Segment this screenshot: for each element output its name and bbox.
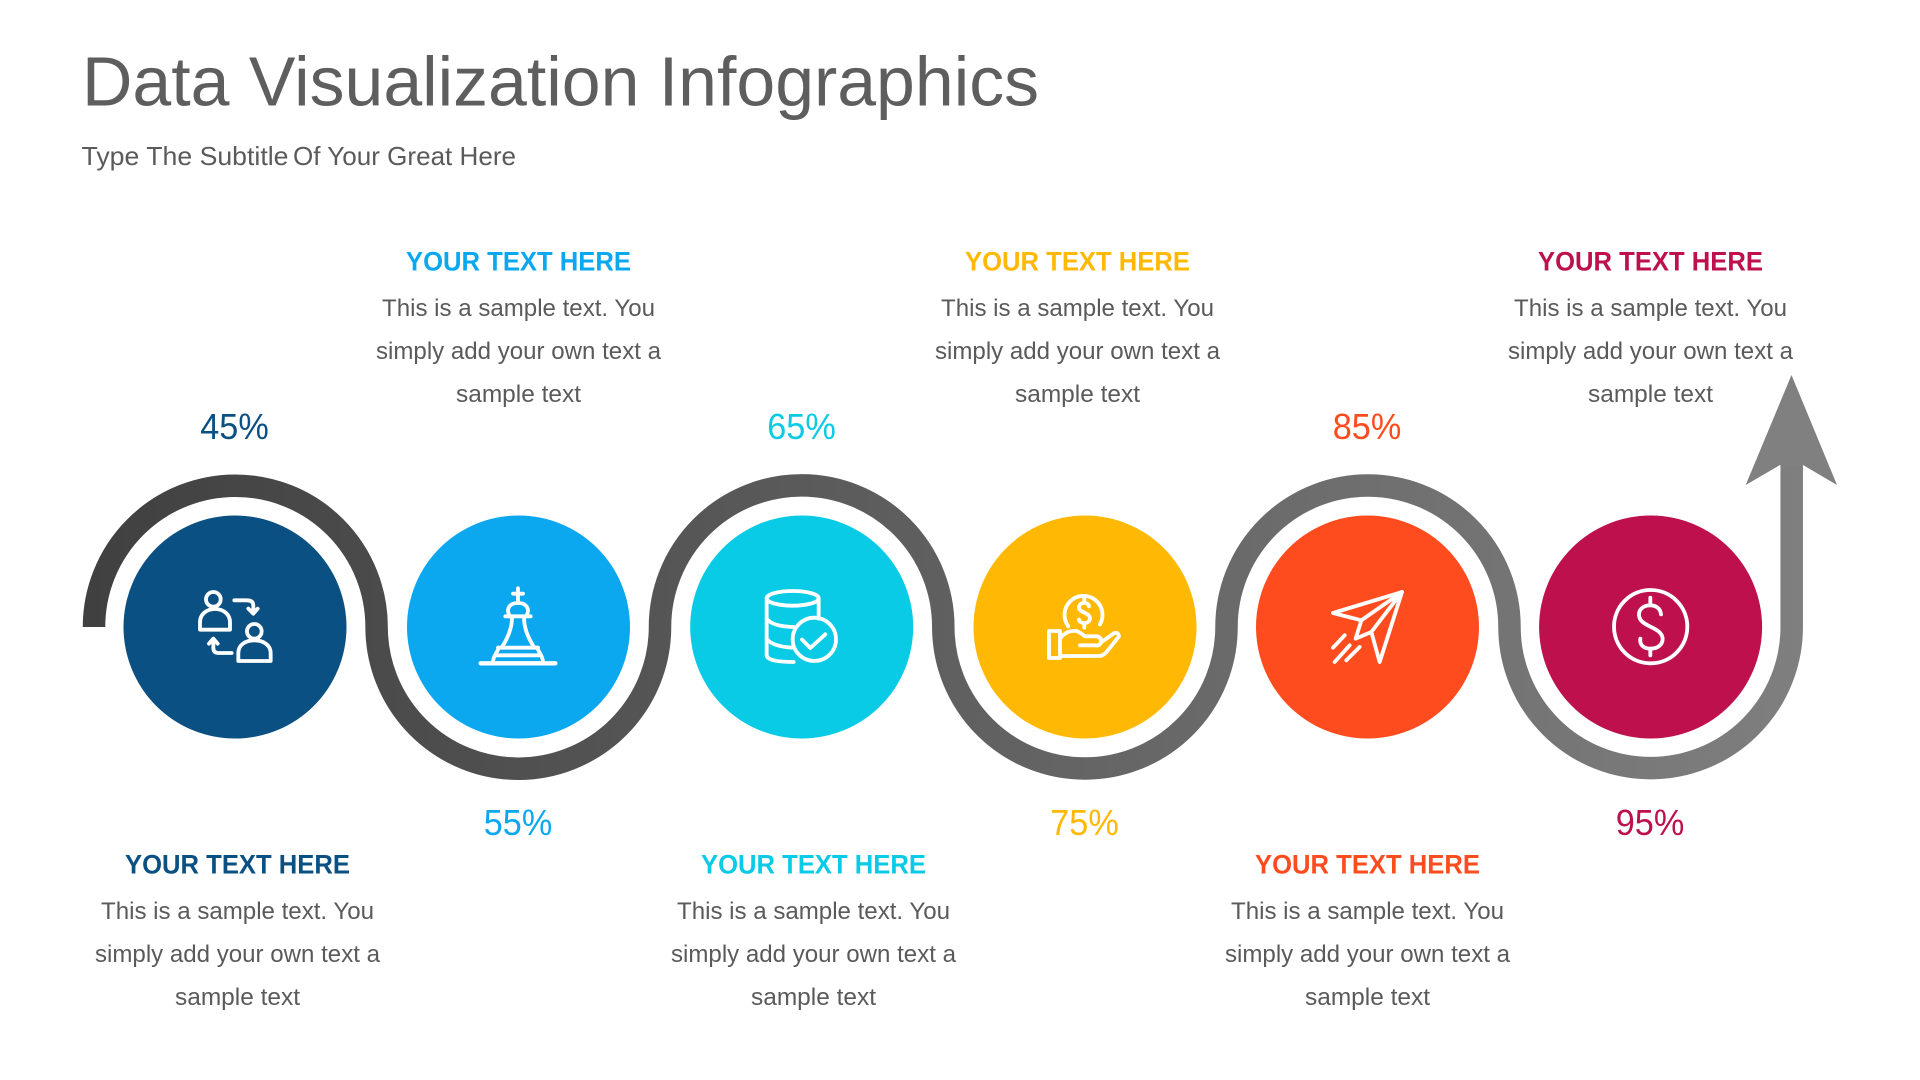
text block: top 1: simply add your own text a — [376, 338, 662, 365]
text block: top 3: This is a sample text. You — [1514, 295, 1787, 322]
text block: bottom 1: simply add your own text a — [95, 941, 381, 968]
text block: top 2: simply add your own text a — [935, 338, 1221, 365]
serpentine arrow — [94, 375, 1837, 769]
text block: bottom 2 — [671, 850, 957, 1011]
text block: top 2 — [935, 246, 1221, 408]
heading: YOUR TEXT HERE — [406, 246, 631, 276]
text block: bottom 2: sample text — [751, 984, 876, 1011]
text block: bottom 3: sample text — [1305, 984, 1430, 1011]
circle 6 — [1539, 516, 1762, 738]
text block: top 2: This is a sample text. You — [941, 295, 1214, 322]
text block: bottom 1: This is a sample text. You — [101, 898, 374, 925]
circle 1 — [124, 516, 346, 738]
text block: bottom 3: simply add your own text a — [1225, 941, 1511, 968]
percent 75: 75% — [1050, 802, 1119, 843]
icon: paper plane — [1333, 592, 1402, 662]
text block: bottom 3 — [1225, 850, 1511, 1011]
title: Data Visualization Infographics — [82, 42, 1039, 120]
text block: bottom 1: sample text — [175, 984, 300, 1011]
heading: YOUR TEXT HERE — [1255, 850, 1480, 880]
heading: YOUR TEXT HERE — [125, 850, 350, 880]
text block: top 1 — [376, 246, 662, 408]
circle 4 — [974, 516, 1196, 738]
subtitle: Of Your Great Here — [293, 141, 516, 171]
circle 5 — [1256, 516, 1479, 738]
heading: YOUR TEXT HERE — [1538, 246, 1763, 276]
heading: YOUR TEXT HERE — [701, 850, 926, 880]
percent 45: 45% — [200, 406, 269, 447]
icon: hand with coin — [1049, 596, 1119, 658]
text block: top 3: sample text — [1588, 381, 1713, 408]
icon: dollar coin — [1614, 590, 1687, 663]
percent 95: 95% — [1616, 802, 1684, 843]
percent 55: 55% — [484, 802, 552, 843]
text block: top 1: This is a sample text. You — [382, 295, 655, 322]
text block: bottom 1 — [95, 850, 381, 1011]
icon: chess king — [481, 588, 555, 663]
text block: top 1: sample text — [456, 381, 581, 408]
heading: YOUR TEXT HERE — [965, 246, 1190, 276]
icon: database check — [767, 591, 836, 662]
percent 85: 85% — [1333, 406, 1401, 447]
text block: top 3 — [1508, 246, 1794, 408]
circle 3 — [690, 516, 913, 738]
percent 65: 65% — [767, 406, 836, 447]
text block: top 3: simply add your own text a — [1508, 338, 1794, 365]
circle 2 — [407, 516, 630, 738]
subtitle: Type The Subtitle — [82, 141, 288, 171]
text block: bottom 2: simply add your own text a — [671, 941, 957, 968]
icon: people exchange — [200, 592, 271, 661]
text block: bottom 3: This is a sample text. You — [1231, 898, 1504, 925]
text block: top 2: sample text — [1015, 381, 1140, 408]
subtitle — [82, 141, 516, 171]
text block: bottom 2: This is a sample text. You — [677, 898, 950, 925]
